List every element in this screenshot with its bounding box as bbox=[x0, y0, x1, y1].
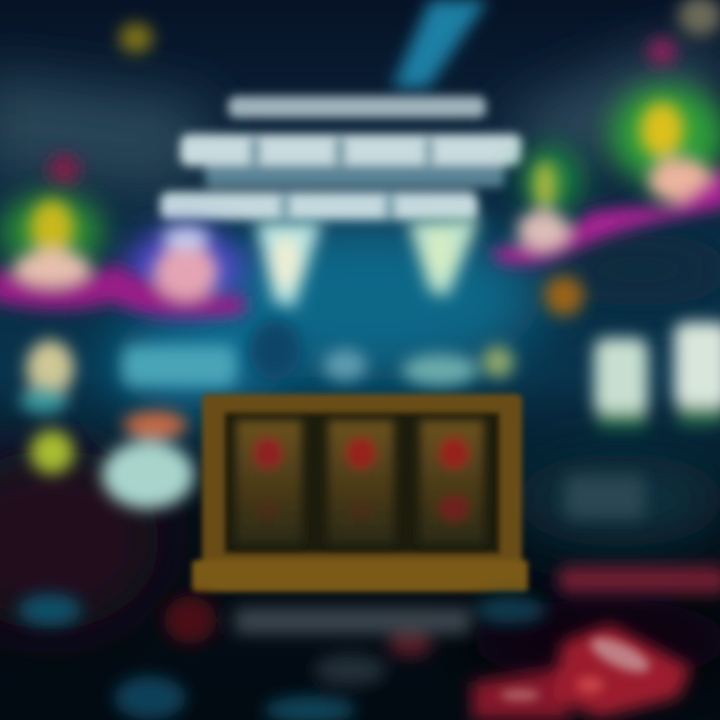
light beam bbox=[392, 0, 488, 88]
left carousel lamp bbox=[0, 194, 245, 316]
icon: glowing drips below title bbox=[255, 218, 480, 308]
reel 2 bbox=[328, 420, 394, 544]
small top lights bbox=[48, 0, 720, 186]
machine base bbox=[18, 594, 546, 720]
icon: orange lamp bbox=[544, 276, 584, 316]
slot machine bbox=[192, 394, 528, 592]
dice bbox=[472, 566, 720, 720]
right carousel lamp bbox=[495, 85, 720, 264]
mid glow strip above machine bbox=[249, 320, 514, 386]
right side signs bbox=[565, 322, 720, 519]
reel 1 bbox=[236, 420, 302, 544]
reel 3 bbox=[420, 420, 484, 544]
heading: blurred title text bbox=[160, 96, 522, 220]
machine body bbox=[192, 394, 528, 592]
left side signs bbox=[20, 340, 237, 509]
